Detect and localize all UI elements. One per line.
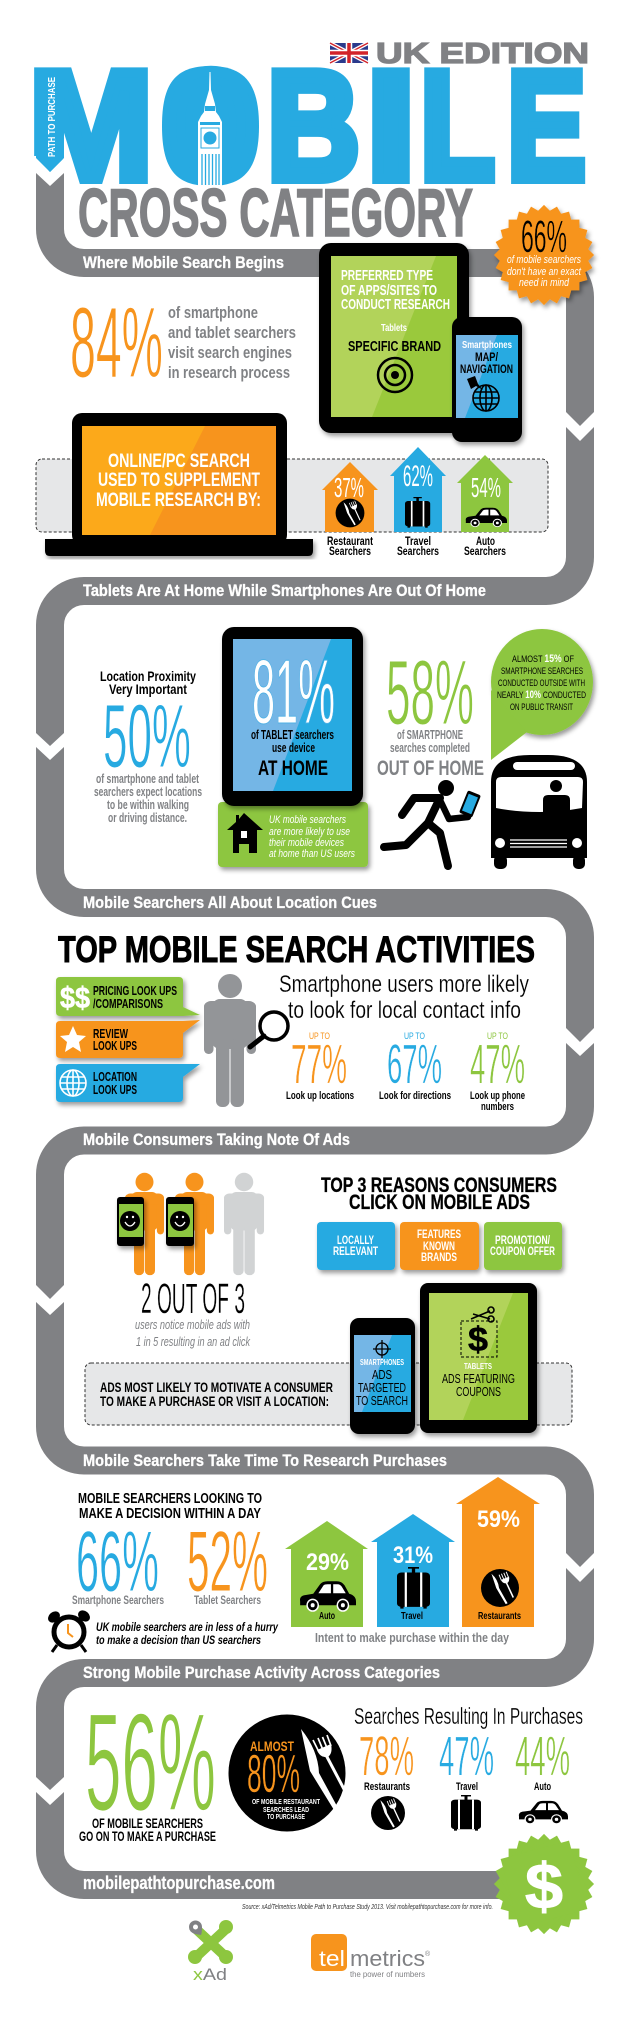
bubble: review look ups: REVIEW [93, 1027, 128, 1041]
phone: ads targeted to search: TARGETED [358, 1380, 406, 1395]
icon: crosshair [373, 1340, 391, 1358]
phone: map navigation: Smartphones [462, 339, 512, 351]
panel: strong purchase activity [79, 1685, 594, 1934]
band heading: location cues: Mobile Searchers All About Location Cues [83, 894, 377, 912]
stat: 47 percent travel: Travel [456, 1781, 478, 1793]
arrow: travel 31 percent: Travel [401, 1610, 423, 1622]
icon: person [204, 974, 256, 1107]
stat: 2 out of 3: 1 in 5 resulting in an ad click [136, 1334, 251, 1349]
stat: 77 percent locations: Look up locations [286, 1090, 354, 1102]
stat: 66 percent smartphone [72, 1514, 164, 1610]
tablet: 81 percent at home [222, 627, 363, 806]
band heading: purchase activity: Strong Mobile Purchase Activity Across Categories [83, 1664, 440, 1682]
stat: 78 percent restaurants: Restaurants [364, 1781, 410, 1793]
button: promotion coupon offer: COUPON OFFER [490, 1244, 555, 1258]
burst: 66 percent: don't have an exact [507, 266, 582, 278]
band heading: tablets at home: Tablets Are At Home While Smartphones Are Out Of Home [83, 582, 486, 600]
icon: phone with smiley [166, 1197, 194, 1246]
icon: bus [491, 755, 587, 869]
header [28, 38, 589, 251]
bubble: pricing look ups: $$ [60, 982, 90, 1015]
burst: dollar: $ [525, 1850, 563, 1922]
arrow: auto searchers 54 percent: 54% [471, 472, 501, 503]
panel: where mobile search begins [36, 205, 594, 558]
button: features known brands: FEATURES [417, 1227, 461, 1241]
arrow: restaurant searchers 37 percent: Restaurant [327, 536, 373, 548]
tablet: ads featuring coupons [420, 1283, 537, 1433]
stat: 56 percent: OF MOBILE SEARCHERS [92, 1816, 203, 1831]
title: MOBILE: I [366, 39, 416, 212]
arrow: auto 29 percent: 29% [306, 1549, 349, 1576]
circle: almost 80 percent: OF MOBILE RESTAURANT [252, 1797, 320, 1806]
icon: alarm clock [46, 1608, 92, 1652]
heading: decision within a day [78, 1491, 262, 1522]
stat: 2 out of 3 [135, 1275, 251, 1349]
tablet: preferred apps: OF APPS/SITES TO [341, 283, 437, 299]
text: smartphone users [279, 971, 529, 1024]
stat: 58 percent out of home [377, 642, 484, 780]
source note: Source: xAd/Telmetrics Mobile Path to Purchase Study 2013. Visit mobilepathtopurchase.com for more info. [242, 1904, 493, 1911]
arrow: travel searchers 62 percent: Searchers [397, 546, 439, 558]
logo: xAd: xAd [193, 1965, 227, 1984]
laptop: online PC search: USED TO SUPPLEMENT [98, 469, 260, 491]
stat: 77 percent locations: 77% [291, 1032, 347, 1095]
stat: location proximity 50 percent: Location Proximity [100, 668, 196, 684]
arrow: auto searchers 54 percent [457, 455, 513, 558]
caption: intent to purchase: Intent to make purchase within the day [315, 1631, 509, 1645]
logo: telmetrics: the power of numbers [350, 1969, 425, 1979]
burst: 66 percent: of mobile searchers [507, 254, 581, 266]
band heading: where mobile search begins: Where Mobile Search Begins [83, 254, 284, 272]
icon: magnifier [250, 1012, 288, 1047]
green note: UK at home: at home than US users [269, 848, 355, 860]
bubble: review look ups: LOOK UPS [93, 1039, 137, 1053]
arrow: travel 31 percent: 31% [393, 1542, 433, 1569]
banner: path to purchase [36, 68, 64, 172]
icon: globe with pin [467, 376, 499, 411]
tablet: preferred apps: SPECIFIC BRAND [348, 339, 441, 355]
stat: 47 percent phone numbers: UP TO [487, 1031, 508, 1042]
note: UK less of a hurry [96, 1622, 278, 1647]
arrow: restaurant searchers 37 percent: 37% [334, 472, 364, 503]
callout: 84 percent: in research process [168, 364, 290, 382]
speech bubble: public transit: ON PUBLIC TRANSIT [510, 702, 573, 713]
phone: map navigation: NAVIGATION [460, 362, 513, 376]
button: promotion coupon offer: PROMOTION/ [495, 1233, 550, 1247]
speech bubble: public transit [491, 629, 593, 760]
icon: house [227, 813, 263, 853]
M bottom-left cover [28, 156, 64, 190]
arrow: auto 29 percent: Auto [319, 1610, 335, 1622]
road chevrons [36, 172, 594, 1805]
button: features known brands: KNOWN [423, 1239, 455, 1253]
text: smartphone users: Smartphone users more likely [279, 971, 529, 998]
circle: almost 80 percent [228, 1714, 346, 1832]
phone: ads targeted to search: TO SEARCH [356, 1393, 408, 1408]
panel: strong purchase activity: 47% [439, 1724, 494, 1787]
logo: telmetrics: metrics [350, 1946, 425, 1971]
button: locally relevant: RELEVANT [333, 1244, 378, 1258]
stat: 66 percent smartphone: Smartphone Searchers [72, 1595, 164, 1607]
tablet: preferred apps: PREFERRED TYPE [341, 268, 433, 284]
stat: 52 percent tablet [187, 1514, 268, 1610]
bubble: pricing look ups: PRICING LOOK UPS [93, 984, 177, 998]
stat: 77 percent locations: UP TO [309, 1031, 330, 1042]
icon: target [378, 358, 412, 392]
tablet: preferred apps: CONDUCT RESEARCH [341, 297, 450, 313]
panel: mobile consumers taking note of ads [85, 1173, 572, 1434]
panel: time to research purchases: 52% [187, 1514, 268, 1610]
note: UK less of a hurry: to make a decision than US searchers [96, 1635, 261, 1647]
stat: 67 percent directions: UP TO [404, 1031, 425, 1042]
icon: Big Ben tower [198, 72, 222, 186]
stat: location proximity 50 percent: to be within walking [107, 798, 189, 812]
speech bubble: public transit: ALMOST 15% OF [512, 653, 574, 665]
dotted strip: ads most likely: ADS MOST LIKELY TO MOTIVATE A CONSUMER [100, 1380, 333, 1395]
burst: 66 percent: need in mind [519, 277, 570, 289]
callout: 84 percent: 84% [70, 287, 163, 399]
tablet: 81 percent at home: use device [272, 741, 315, 755]
O backing shape [162, 66, 259, 186]
arrow: travel searchers 62 percent: 62% [403, 460, 433, 493]
arrow: travel 31 percent [371, 1514, 455, 1627]
stat: 47 percent phone numbers [470, 1031, 525, 1113]
logo: telmetrics [311, 1934, 431, 1979]
callout: 84 percent: and tablet searchers [168, 324, 296, 342]
stat: 58 percent out of home: OUT OF HOME [377, 757, 484, 780]
panel: strong purchase activity: 56% [85, 1685, 216, 1840]
bubble: review look ups [56, 1020, 200, 1058]
logo: xAd [188, 1920, 233, 1984]
stat: 44 percent auto: Auto [534, 1781, 551, 1793]
heading: decision within a day: MAKE A DECISION WITHIN A DAY [79, 1506, 261, 1522]
green note: UK at home: their mobile devices [269, 837, 344, 849]
stat: 47 percent phone numbers: Look up phone [470, 1090, 525, 1102]
dotted strip [36, 459, 548, 532]
laptop: online PC search [45, 413, 313, 556]
bubble: pricing look ups: /COMPARISONS [93, 997, 163, 1011]
callout: 84 percent: visit search engines [168, 344, 292, 362]
stat: location proximity 50 percent [94, 668, 202, 825]
circle: almost 80 percent: 80% [247, 1744, 300, 1804]
heading: top 3 reasons: CLICK ON MOBILE ADS [349, 1191, 530, 1214]
title: MOBILE: M [29, 39, 153, 212]
speech bubble: public transit: CONDUCTED OUTSIDE WITH [498, 678, 585, 689]
tablet: ads featuring coupons: COUPONS [456, 1384, 501, 1399]
arrow: auto searchers 54 percent: Searchers [464, 546, 506, 558]
stat: 56 percent: GO ON TO MAKE A PURCHASE [79, 1829, 216, 1844]
dotted strip: ads most likely [85, 1363, 572, 1425]
stat: 2 out of 3: users notice mobile ads with [135, 1317, 250, 1332]
circle: almost 80 percent: ALMOST [250, 1738, 294, 1754]
button: locally relevant [317, 1222, 395, 1270]
callout: 84 percent: of smartphone [168, 304, 258, 322]
panel: mobile consumers taking note of ads: 2 OUT OF 3 [141, 1275, 245, 1323]
bubble: location look ups: LOOK UPS [93, 1083, 137, 1097]
phone: map navigation: MAP/ [475, 350, 499, 364]
stat: location proximity 50 percent: 50% [103, 687, 191, 787]
bubble: pricing look ups [56, 977, 200, 1016]
button: promotion coupon offer [484, 1222, 562, 1270]
icon: running man with phone [384, 780, 481, 866]
stat: 44 percent auto [515, 1724, 570, 1824]
phone: ads targeted to search [350, 1318, 415, 1434]
burst: 66 percent [494, 205, 594, 305]
tablet: ads featuring coupons: ADS FEATURING [442, 1371, 515, 1386]
arrow: restaurant searchers 37 percent: Searchers [329, 546, 371, 558]
tablet: 81 percent at home: AT HOME [258, 757, 328, 780]
stat: 58 percent out of home: 58% [386, 642, 474, 744]
people: two of three [117, 1173, 264, 1275]
title: MOBILE: O [168, 39, 254, 212]
stat: location proximity 50 percent: or driving distance. [108, 811, 187, 825]
phone: ads targeted to search: SMARTPHONES [360, 1358, 404, 1367]
speech bubble: public transit: SMARTPHONE SEARCHES [501, 666, 583, 677]
stat: location proximity 50 percent: Very Important [109, 681, 187, 697]
arrow: auto 29 percent [285, 1521, 368, 1627]
stat: 58 percent out of home: searches completed [390, 741, 470, 755]
band heading: time to research: Mobile Searchers Take Time To Research Purchases [83, 1452, 447, 1470]
phone: ads targeted to search: ADS [372, 1367, 392, 1382]
bubble: location look ups: LOCATION [93, 1070, 137, 1084]
note: UK less of a hurry: UK mobile searchers are in less of a hurry [96, 1622, 278, 1634]
icon: UK flag [330, 43, 368, 63]
stat: 78 percent restaurants [359, 1724, 414, 1830]
stat: 66 percent smartphone: 66% [76, 1514, 159, 1610]
icon: phone with smiley [117, 1197, 144, 1246]
panel: strong purchase activity: 44% [515, 1724, 570, 1787]
arrow: auto searchers 54 percent: Auto [476, 536, 495, 548]
logo: telmetrics: tel [319, 1946, 345, 1971]
heading: decision within a day: MOBILE SEARCHERS LOOKING TO [78, 1491, 262, 1507]
green note: UK at home [218, 802, 368, 867]
edition label: UK EDITION [376, 38, 589, 70]
title: MOBILE: L [420, 39, 495, 212]
green note: UK at home: UK mobile searchers [269, 814, 346, 826]
arrow: restaurants 59 percent: Restaurants [478, 1610, 521, 1622]
arrow: travel searchers 62 percent: Travel [405, 536, 431, 548]
grey winding road [50, 173, 580, 1885]
dotted strip: ads most likely: TO MAKE A PURCHASE OR VISIT A LOCATION: [100, 1394, 329, 1409]
band heading: taking note of ads: Mobile Consumers Taking Note Of Ads [83, 1131, 350, 1149]
button: features known brands [400, 1222, 479, 1270]
laptop: online PC search: ONLINE/PC SEARCH [108, 450, 250, 472]
circle: almost 80 percent: TO PURCHASE [267, 1812, 305, 1821]
panel: top mobile search activities: 47% [470, 1032, 525, 1095]
tablet: preferred apps [319, 243, 469, 433]
text: smartphone users: to look for local contact info [288, 997, 521, 1024]
tablet: 81 percent at home: 81% [252, 642, 335, 743]
icon: scissors [471, 1307, 494, 1322]
title: MOBILE: B [267, 39, 360, 212]
button: locally relevant: LOCALLY [337, 1233, 374, 1247]
stat: 47 percent travel [439, 1724, 494, 1831]
burst: 66 percent: 66% [521, 211, 567, 262]
arrow: restaurant searchers 37 percent [322, 462, 378, 558]
stat: 58 percent out of home: of SMARTPHONE [397, 728, 463, 742]
stat: 67 percent directions [379, 1031, 451, 1102]
burst: dollar [494, 1834, 594, 1934]
circle: almost 80 percent: SEARCHES LEAD [263, 1805, 309, 1814]
heading: top 3 reasons [321, 1174, 557, 1214]
stat: location proximity 50 percent: searchers expect locations [94, 785, 202, 799]
stat: 77 percent locations [286, 1031, 354, 1102]
tablet: preferred apps: Tablets [381, 322, 407, 334]
logo: telmetrics: ® [425, 1950, 431, 1958]
stat: 52 percent tablet: Tablet Searchers [194, 1595, 261, 1607]
stat: location proximity 50 percent: of smartphone and tablet [96, 772, 200, 786]
tablet: 81 percent at home: of TABLET searchers [251, 728, 334, 742]
phone: map navigation [452, 317, 522, 442]
button: features known brands: BRANDS [421, 1250, 457, 1264]
banner: path to purchase: PATH TO PURCHASE [47, 77, 58, 157]
panel: strong purchase activity: 78% [359, 1724, 414, 1787]
title: MOBILE: E [507, 39, 586, 212]
stat: 67 percent directions: Look for directions [379, 1090, 451, 1102]
heading: top 3 reasons: TOP 3 REASONS CONSUMERS [321, 1174, 557, 1197]
tablet: ads featuring coupons: $ [468, 1321, 488, 1359]
stat: 47 percent phone numbers: numbers [481, 1101, 514, 1113]
green note: UK at home: are more likely to use [269, 826, 350, 838]
panel: tablets at home, smartphones out of home [94, 627, 593, 869]
arrow: restaurants 59 percent: 59% [477, 1506, 520, 1533]
bubble: location look ups [56, 1064, 200, 1102]
panel: time to research purchases [46, 1477, 540, 1652]
tablet: ads featuring coupons: TABLETS [464, 1362, 493, 1371]
arrow: restaurants 59 percent [456, 1477, 540, 1627]
band heading: website: mobilepathtopurchase.com [83, 1873, 275, 1893]
laptop: online PC search: MOBILE RESEARCH BY: [96, 489, 261, 511]
arrow: travel searchers 62 percent [390, 447, 446, 558]
speech bubble: public transit: NEARLY 10% CONDUCTED [497, 689, 586, 701]
panel: top mobile search activities [56, 929, 535, 1113]
stat: 56 percent [79, 1685, 216, 1844]
stat: 67 percent directions: 67% [387, 1032, 442, 1095]
